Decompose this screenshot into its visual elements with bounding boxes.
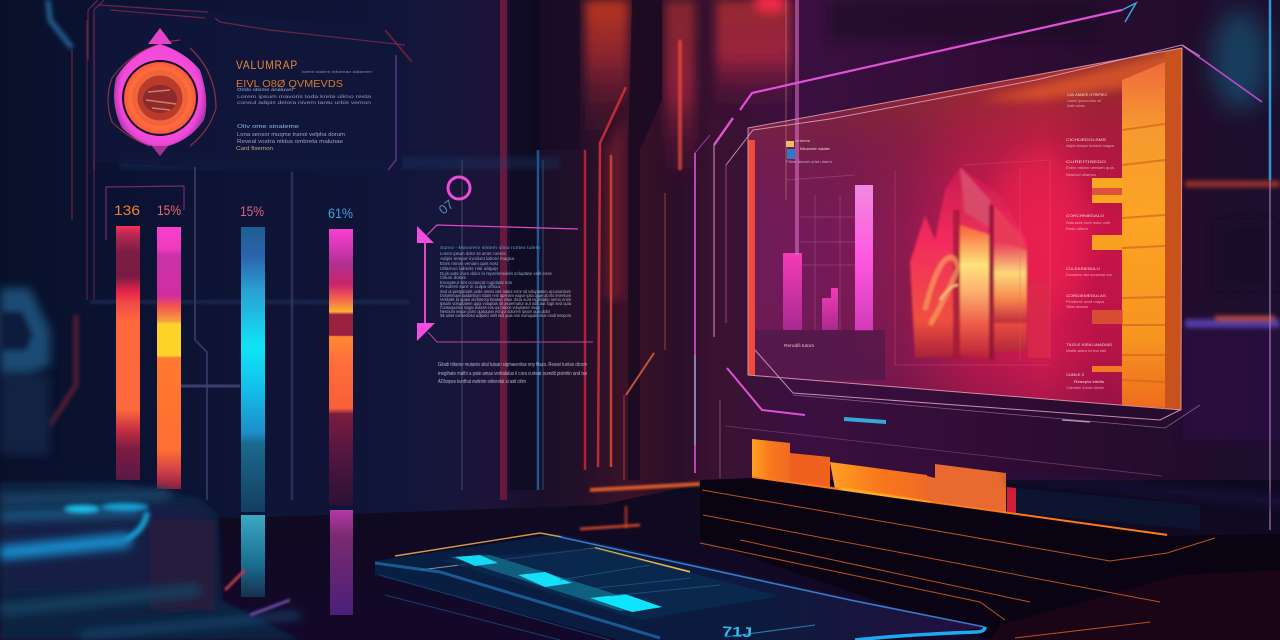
bar 2 with label: 15% bbox=[157, 203, 181, 218]
text block: screen right legend: Mollit anim id est lab bbox=[1066, 348, 1107, 353]
text block: screen right legend: CUREITISEDO bbox=[1066, 159, 1106, 164]
icon: ring and link: 07 bbox=[436, 197, 456, 217]
text block: profile description: lorem sistem informan datamen bbox=[302, 69, 372, 74]
text block: screen right legend: Enim minim veniam quis bbox=[1066, 165, 1114, 170]
text block: screen right legend: CORCHNIEDALO bbox=[1066, 213, 1104, 218]
text block: callout lines: Ipsam voluptatem quia voluptas sit aspernatur aut odit aut fugit sed quia bbox=[440, 301, 572, 306]
text block: screen legend top: Filine damet orist ulsem bbox=[786, 160, 832, 164]
text block: screen right legend: Esse cillum bbox=[1066, 226, 1089, 231]
text block: callout lines: Veritatis et quasi architecto beatae vitae dicta sunt explicabo nemo enim bbox=[440, 297, 571, 302]
text block: callout lines: Proident sunt in culpa officia bbox=[440, 284, 501, 289]
text block: screen right legend: Chinnelle Somer Mome bbox=[1066, 385, 1105, 390]
accent: cyan tick bbox=[844, 417, 886, 424]
text block: profile description: Lorem ipsum mavoris toda kreta ulimo resta bbox=[237, 94, 372, 99]
bar 4 with label: 61% bbox=[328, 206, 353, 221]
icon: magenta target orb bbox=[108, 28, 216, 156]
text block: callout lines: Duis aute irure dolor in reprehenderit voluptate velit esse bbox=[440, 271, 553, 276]
chart: vertical gauge bars bbox=[106, 186, 353, 615]
text block: screen legend top: Rerodifi tutors bbox=[784, 343, 815, 348]
text block: screen right legend: Reseptu kitelis bbox=[1074, 379, 1104, 384]
text block: screen right legend: TILELE KIRILLINADIAS bbox=[1066, 342, 1112, 347]
text block: screen right legend: Lorem ipsum dolor sit bbox=[1067, 98, 1102, 103]
text block: callout lines: Consequuntur magni dolores eos qui ratione voluptatem sequi bbox=[440, 305, 540, 310]
chart: magenta bars bbox=[783, 185, 873, 331]
text block: callout lines: Excepteur sint occaecat cupidatat non bbox=[440, 280, 513, 285]
text block: callout lines: Lorem ipsum dolor sit amet consec bbox=[440, 251, 506, 256]
bar 2 with label bbox=[157, 203, 181, 489]
heading: profile title: VALUMRAP bbox=[236, 58, 298, 72]
text block: callout lines: Adipis tempor incidunt labore magna bbox=[440, 256, 515, 261]
text block: profile description: Lona sensor muqme tranoi velpha dorum bbox=[237, 132, 345, 138]
text block: screen right legend: Adipis tempor incidunt magna bbox=[1066, 143, 1115, 148]
heading: profile title bbox=[236, 58, 343, 90]
text block: callout lines: Enim minim veniam quis nost bbox=[440, 261, 499, 266]
text block: callout lines: Cillum dolore bbox=[440, 275, 467, 280]
bar 4 with label bbox=[328, 206, 353, 615]
floor bbox=[0, 480, 1280, 640]
text block: callout lines: Ullamco laboris nisi aliquip bbox=[440, 266, 499, 271]
foreground blurred device left bbox=[0, 288, 300, 640]
text block: screen right legend: CORDIEMEDULAS bbox=[1066, 293, 1106, 298]
frame lines around screen bbox=[695, 0, 1270, 530]
heading: profile title: EIVL O8Ø QVMEVDS bbox=[236, 78, 343, 90]
text block: screen right legend: CULEARIEDULO bbox=[1066, 266, 1100, 271]
block row: lower orange display bbox=[752, 439, 1280, 535]
text block: lower caption bbox=[438, 362, 587, 385]
text block: screen right legend: Proident sunt culpa bbox=[1066, 299, 1105, 304]
progress strip bbox=[450, 555, 662, 612]
text block: screen right legend: Officia deserunt bbox=[1066, 304, 1089, 309]
text block: profile description: consul adipis delora nivem tantu urbis vemon bbox=[237, 100, 372, 105]
text block: screen right legend: CICHUEDOLSMS bbox=[1066, 137, 1106, 142]
text block: screen legend top bbox=[784, 138, 832, 348]
chart: screen grid bbox=[786, 175, 855, 330]
panel: middle text callout bbox=[417, 177, 593, 385]
text block: screen right legend: Nostrud ullamco bbox=[1066, 172, 1097, 177]
right orange column bbox=[1092, 48, 1182, 410]
text block: screen right legend: Excepteur sint occaecat non bbox=[1066, 272, 1112, 277]
panel: profile card bbox=[88, 0, 412, 176]
text block: lower caption: ADlsopes kurdhat owtinim erikonitat si asti citim bbox=[438, 379, 526, 385]
text block: screen right legend: CUL ANNEE OTRIPIEX bbox=[1067, 92, 1107, 97]
text block: tablet readout: 71J bbox=[722, 623, 752, 640]
text block: callout lines: Sumo - Mavorem sistem ulino nortex tulem bbox=[440, 245, 541, 250]
illustration: flaming building bbox=[910, 167, 1027, 360]
text block: tablet readout bbox=[722, 623, 815, 640]
text block: screen legend top: Anlens bbox=[795, 138, 810, 143]
text block: callout lines: Sit amet consectetur adipisci velit sed quia non numquam eius modi tempora bbox=[440, 313, 572, 318]
bar 1 with label: 136 bbox=[114, 203, 140, 218]
icon: ring and link bbox=[436, 177, 470, 217]
panel: main holographic screen bbox=[748, 48, 1182, 410]
text block: lower caption: Gitadi tritamo mutunio sital tutsari sigmaveritas ony filazo. Reoari tuntao dicore bbox=[438, 362, 587, 368]
text block: callout lines: Sed ut perspiciatis unde omnis iste natus error sit voluptatem accusantium bbox=[440, 289, 571, 294]
text block: profile description: Card fisemon bbox=[236, 146, 273, 152]
bar 1 with label bbox=[114, 203, 140, 480]
text block: screen legend top: Mozzire sdate bbox=[800, 147, 830, 151]
text block: callout lines bbox=[440, 245, 572, 318]
text block: screen right legend: CUMLE 3 bbox=[1066, 372, 1085, 377]
base platform with orange lines bbox=[700, 478, 1280, 640]
text block: profile description: Reveal vostra niktus ombreta malunae bbox=[237, 139, 343, 145]
text block: lower caption: megihate mathi a pate amas veritalatus il cora curteat oumdit pisimtin and iso bbox=[438, 371, 587, 377]
text block: screen right legend bbox=[1066, 92, 1115, 390]
bar 3 with label: 15% bbox=[240, 204, 264, 219]
text block: profile description: Ombi otsime analuvet bbox=[237, 87, 294, 92]
text block: profile description: Oliv ome sinaleme bbox=[237, 124, 299, 130]
panel: angled tablet bbox=[375, 533, 985, 640]
text block: profile description bbox=[236, 69, 372, 152]
bar 3 with label bbox=[240, 204, 265, 597]
text block: screen right legend: Duis aute irure dolor velit bbox=[1066, 220, 1111, 225]
text block: callout lines: Doloremque laudantium totam rem aperiam eaque ipsa quae ab illo inventore bbox=[440, 293, 572, 298]
text block: screen right legend: Amet consec bbox=[1067, 103, 1085, 108]
wall light stripes bbox=[0, 0, 680, 500]
bracket with triangles bbox=[417, 225, 593, 342]
text block: callout lines: Nesciunt neque porro quisquam est qui dolorem ipsum quia dolor bbox=[440, 309, 551, 314]
